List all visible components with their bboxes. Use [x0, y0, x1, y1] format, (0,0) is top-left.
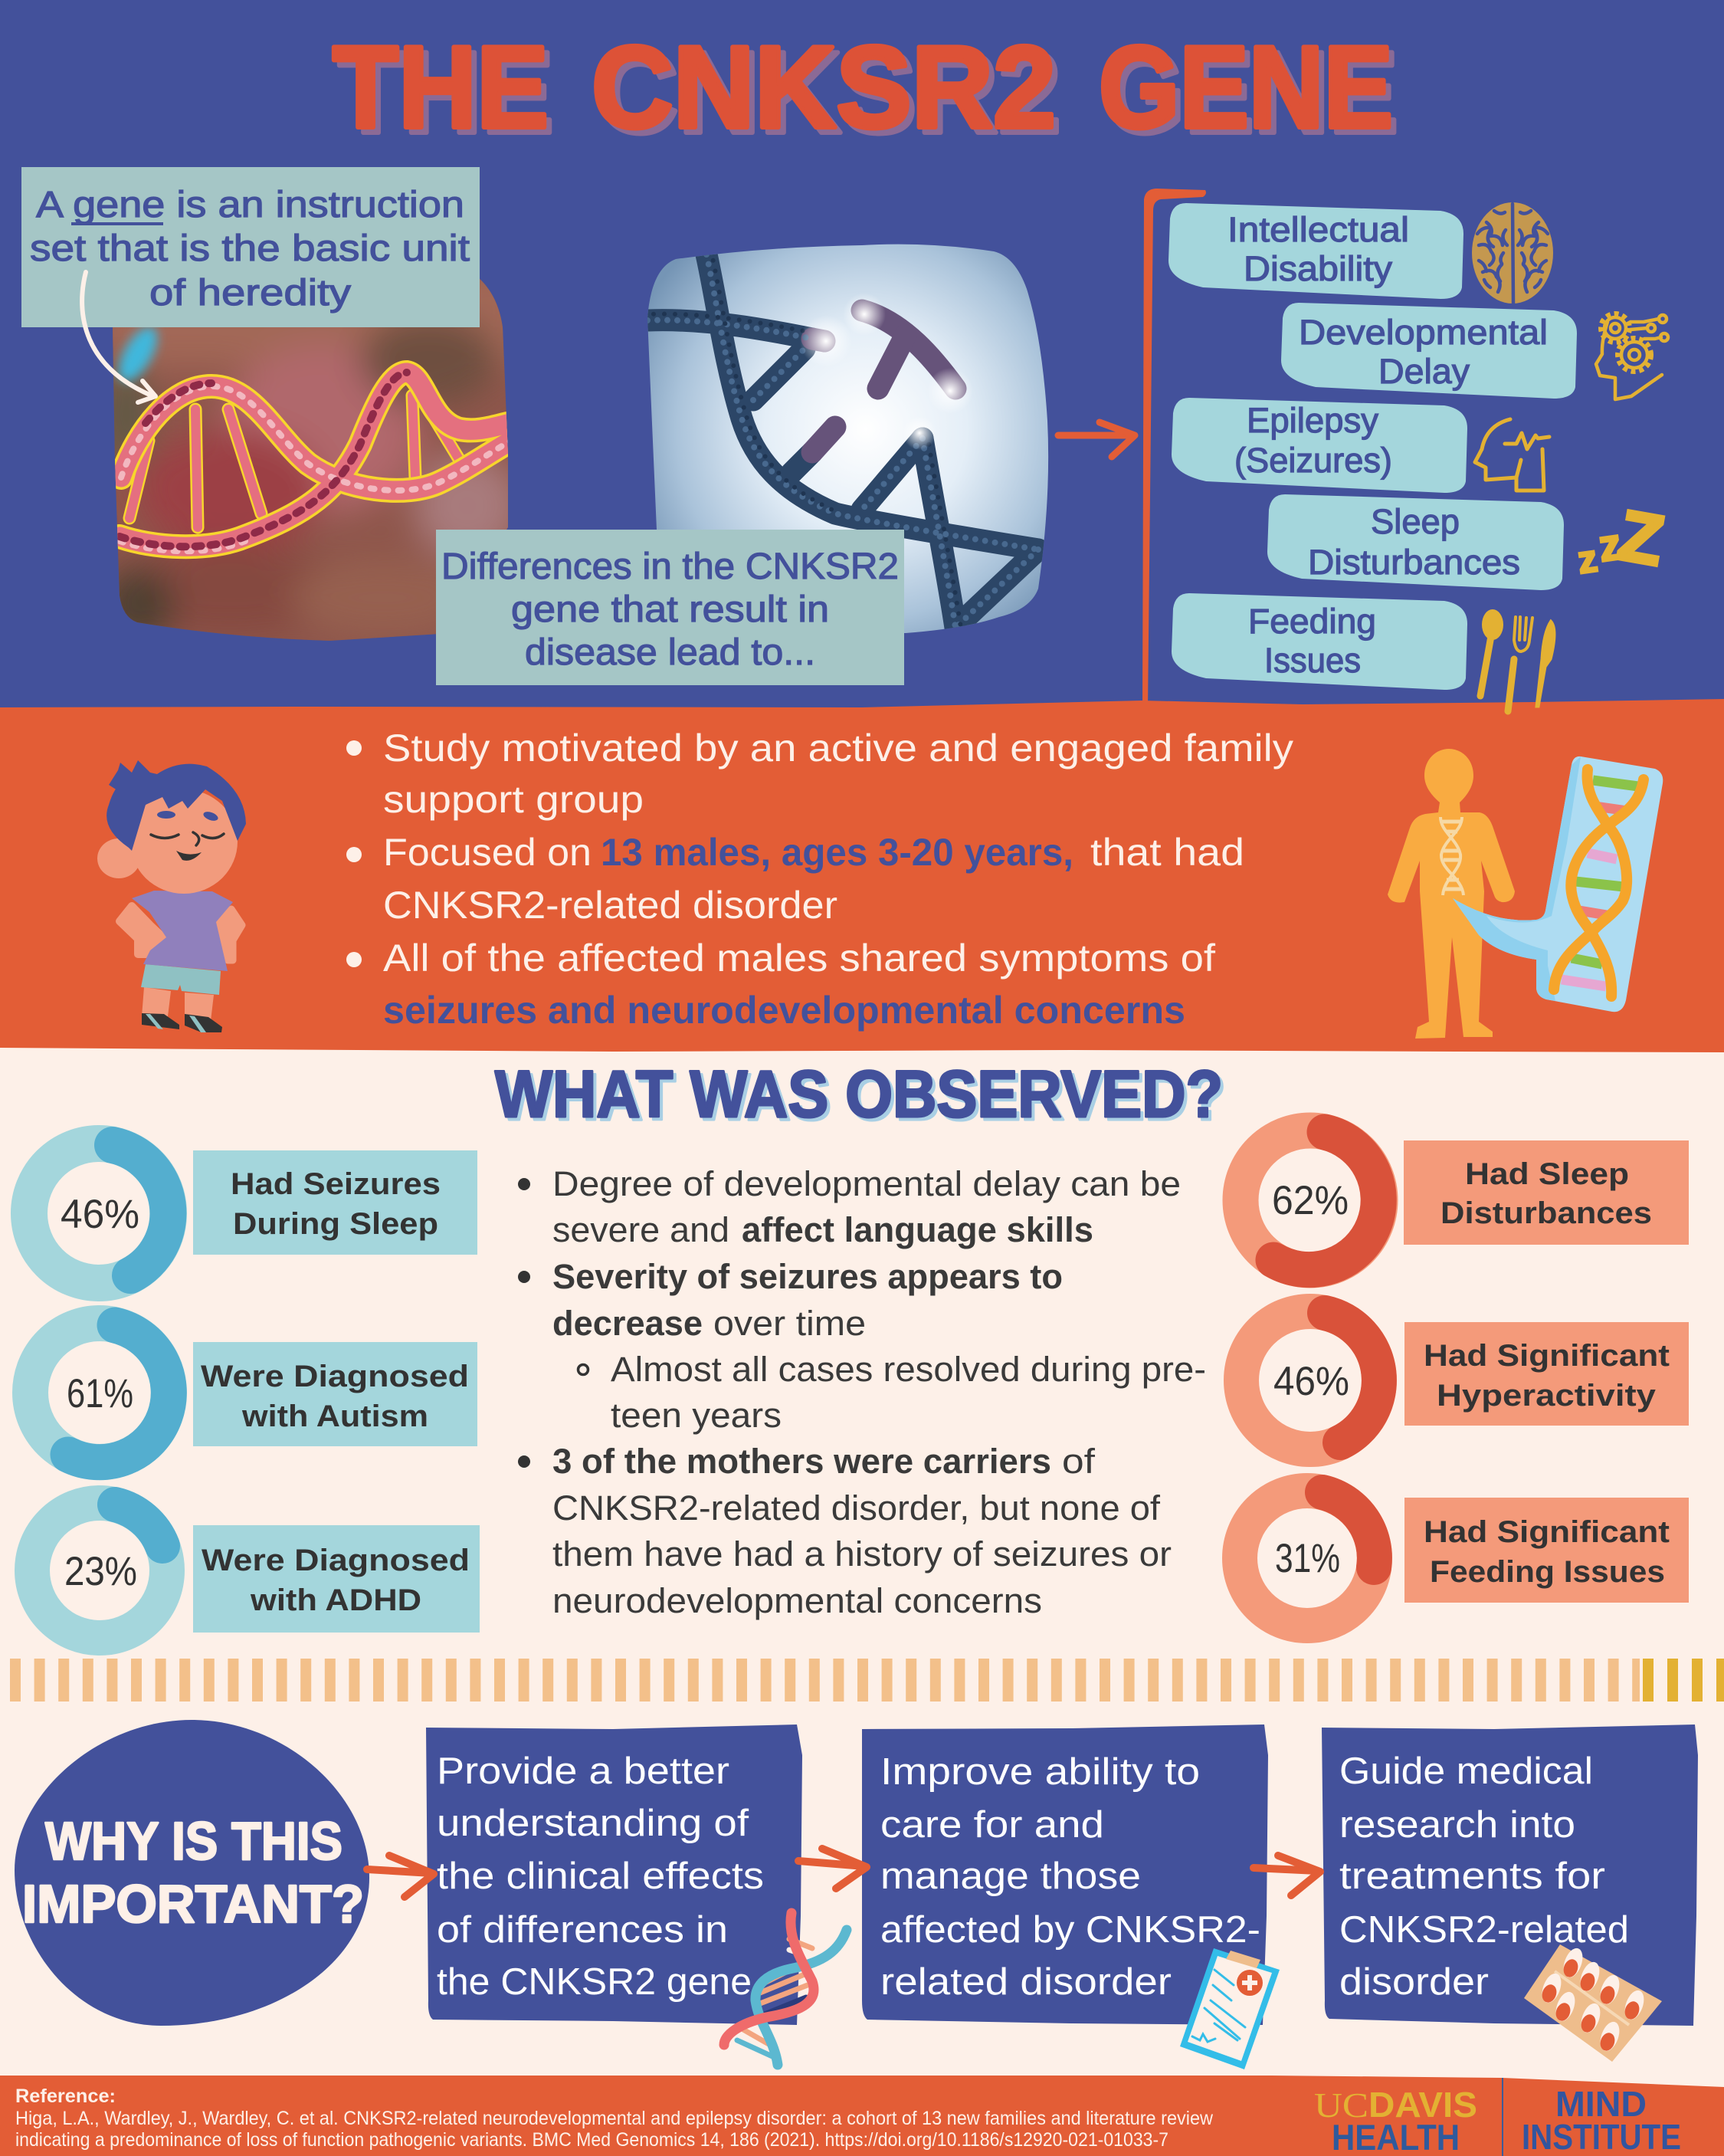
- symptom: developmental delay: [1281, 303, 1577, 399]
- panel: improve care: related disorder: [880, 1961, 1172, 2003]
- panel: better understanding: the clinical effects: [437, 1856, 764, 1897]
- symptom: intellectual disability: Intellectual: [1227, 210, 1409, 249]
- bullet list: observations: affect language skills: [742, 1210, 1093, 1249]
- label: significant hyperactivity: Had Significant: [1424, 1339, 1670, 1373]
- icon: zzz: z: [1595, 519, 1624, 571]
- heading badge: why is this important: WHY IS THIS: [45, 1811, 343, 1871]
- panel: improve care: manage those: [880, 1856, 1141, 1897]
- donut chart: 23% ADHD: 23%: [64, 1549, 137, 1594]
- logo: MIND Institute: [1522, 2084, 1681, 2156]
- donut chart: 61% autism: 61%: [67, 1371, 133, 1416]
- panel: footer band: [0, 2076, 1724, 2156]
- donut chart: 61% autism: [31, 1323, 169, 1462]
- bullet list: study facts: that had: [1090, 831, 1244, 874]
- panel: guide medical research: Guide medical: [1339, 1751, 1593, 1792]
- photo: dark blue beaded DNA on bright sky: [647, 244, 1048, 633]
- heading: what was observed: WHAT WAS OBSERVED?: [495, 1058, 1223, 1131]
- reference citation: [15, 2085, 1214, 2151]
- bullet list: observations: [518, 1164, 1206, 1620]
- label: diagnosed with ADHD: with ADHD: [250, 1583, 421, 1617]
- heading badge: why is this important: [15, 1720, 369, 2026]
- bullet list: observations: of: [1062, 1442, 1096, 1481]
- callout: gene definition: set that is the basic unit: [30, 228, 470, 269]
- panel: better understanding: of differences in: [437, 1909, 728, 1951]
- arrow: second to third benefit: [1254, 1856, 1320, 1895]
- icon: brain: [1472, 202, 1553, 304]
- logo: UC Davis Health: DAVIS: [1368, 2085, 1477, 2125]
- reference citation: indicating a predominance of loss of function pathogenic variants. BMC Med Genomics 14, 186 (2021). https://doi.org/10.1186/s12920-021-01033-7: [15, 2129, 1168, 2151]
- symptom: epilepsy: Epilepsy: [1247, 401, 1379, 440]
- callout: differences lead to: Differences in the CNKSR2: [441, 546, 899, 587]
- bullet list: observations: Severity of seizures appears to: [552, 1257, 1063, 1296]
- donut chart: 46% seizures during sleep: [29, 1144, 169, 1283]
- heading: what was observed: WHAT WAS OBSERVED?: [498, 1061, 1226, 1134]
- label: diagnosed with autism: with Autism: [241, 1400, 428, 1433]
- panel: better understanding: the CNKSR2 gene: [437, 1961, 752, 2003]
- reference citation: Higa, L.A., Wardley, J., Wardley, C. et al. CNKSR2-related neurodevelopmental and epilepsy disorder: a cohort of 13 new families and literature review: [15, 2108, 1214, 2129]
- icon: head with gears: [1596, 313, 1668, 399]
- title: [333, 22, 1398, 158]
- panel: orange study motivation band: [0, 699, 1724, 1052]
- icon: head with seizure pulse: [1475, 419, 1549, 491]
- title: THE: [338, 28, 554, 158]
- bullet list: study facts: support group: [383, 778, 644, 821]
- label: had seizures during sleep: Had Seizures: [231, 1167, 441, 1201]
- panel: better understanding: [426, 1724, 802, 2025]
- panel: improve care: Improve ability to: [880, 1751, 1200, 1793]
- logo: UC Davis Health: [1314, 2085, 1477, 2156]
- bullet list: observations: neurodevelopmental concerns: [552, 1581, 1042, 1620]
- bullet list: observations: Degree of developmental delay can be: [552, 1164, 1181, 1203]
- symptom: feeding issues: [1172, 593, 1467, 690]
- bullet list: observations: Almost all cases resolved during pre-: [611, 1350, 1206, 1389]
- arrow: white curved pointer to DNA: [82, 272, 156, 402]
- bullet list: study facts: seizures and neurodevelopmental concerns: [383, 989, 1185, 1032]
- bullet list: study facts: All of the affected males shared symptoms of: [383, 937, 1215, 980]
- heading badge: why is this important: IMPORTANT?: [22, 1874, 364, 1934]
- label: had sleep disturbances: Disturbances: [1440, 1196, 1652, 1230]
- callout: gene definition: of heredity: [149, 273, 351, 313]
- label: diagnosed with autism: Were Diagnosed: [201, 1360, 469, 1393]
- label: diagnosed with autism: [193, 1342, 477, 1446]
- bullet list: study facts: CNKSR2-related disorder: [383, 884, 837, 927]
- icon: zzz: z: [1575, 537, 1600, 582]
- symptom: sleep disturbances: Sleep: [1371, 502, 1460, 541]
- bullet list: observations: them have had a history of seizures or: [552, 1534, 1172, 1574]
- label: had sleep disturbances: Had Sleep: [1465, 1157, 1629, 1191]
- donut chart: 62% sleep disturbances: 62%: [1272, 1178, 1349, 1223]
- callout: gene definition: [21, 167, 480, 327]
- label: significant hyperactivity: Hyperactivity: [1437, 1379, 1657, 1413]
- panel: guide medical research: [1322, 1724, 1698, 2026]
- title: CNKSR2: [592, 22, 1056, 153]
- donut chart: 46% seizures during sleep: 46%: [61, 1192, 139, 1237]
- label: significant feeding issues: [1404, 1498, 1689, 1603]
- icon: blister pack of pills: [1524, 1944, 1662, 2062]
- title: GENE: [1104, 28, 1398, 158]
- panel: better understanding: Provide a better: [437, 1751, 729, 1792]
- icon: zzz: Z: [1613, 496, 1669, 580]
- bullet list: study facts: Study motivated by an active and engaged family: [383, 727, 1293, 770]
- logo: MIND Institute: INSTITUTE: [1522, 2117, 1681, 2156]
- bullet list: observations: over time: [713, 1304, 866, 1343]
- logo: UC Davis Health: UC: [1314, 2085, 1368, 2125]
- panel: blue header section: [0, 0, 1724, 713]
- illustration: boy with hands on hips: [97, 760, 246, 1032]
- arrow: to symptom bracket: [1058, 422, 1135, 457]
- panel: guide medical research: research into: [1339, 1804, 1575, 1846]
- bullet list: observations: 3 of the mothers were carriers: [552, 1442, 1051, 1481]
- symptom: developmental delay: Delay: [1378, 352, 1470, 391]
- arrow: first to second benefit: [798, 1849, 867, 1889]
- label: significant hyperactivity: [1404, 1322, 1689, 1426]
- symptom: epilepsy: (Seizures): [1234, 441, 1392, 480]
- reference citation: Reference:: [15, 2085, 116, 2107]
- title: THE: [333, 22, 549, 153]
- arrow: why to first benefit: [367, 1856, 434, 1897]
- bracket: symptom list: [1142, 189, 1206, 709]
- panel: improve care: [862, 1724, 1268, 2025]
- symptom: developmental delay: Developmental: [1299, 313, 1548, 352]
- callout: differences lead to: [436, 530, 904, 685]
- panel: improve care: care for and: [880, 1804, 1104, 1846]
- callout: differences lead to: disease lead to...: [525, 632, 815, 673]
- title: GENE: [1099, 22, 1393, 153]
- panel: improve care: affected by CNKSR2-: [880, 1909, 1260, 1951]
- symptom: feeding issues: Feeding: [1248, 602, 1376, 641]
- symptom: sleep disturbances: Disturbances: [1308, 543, 1520, 582]
- bullet list: study facts: [346, 727, 1293, 1032]
- donut chart: 62% sleep disturbances: [1241, 1131, 1380, 1270]
- donut chart: 31% feeding issues: 31%: [1275, 1536, 1340, 1581]
- label: significant feeding issues: Had Significant: [1424, 1515, 1670, 1549]
- symptom: feeding issues: Issues: [1264, 641, 1361, 680]
- logo: MIND Institute: MIND: [1555, 2084, 1647, 2124]
- icon: spoon fork knife: [1480, 609, 1555, 711]
- symptom: sleep disturbances: [1267, 494, 1564, 590]
- bullet list: observations: decrease: [552, 1304, 703, 1343]
- photo: gold and pink DNA strand on blurred red background: [113, 279, 508, 641]
- title: CNKSR2: [597, 28, 1061, 158]
- panel: guide medical research: disorder: [1339, 1961, 1489, 2003]
- bullet list: study facts: Focused on: [383, 831, 592, 874]
- callout: differences lead to: gene that result in: [511, 589, 829, 630]
- icon: DNA helix: [724, 1913, 847, 2065]
- bullet list: observations: severe and: [552, 1210, 729, 1249]
- bullet list: study facts: 13 males, ages 3-20 years,: [601, 831, 1073, 874]
- symptom: intellectual disability: Disability: [1244, 249, 1393, 288]
- illustration: person with DNA callout: [1388, 749, 1663, 1039]
- icon: zzz: [1575, 496, 1669, 582]
- label: significant feeding issues: Feeding Issues: [1430, 1555, 1665, 1589]
- donut chart: 31% feeding issues: [1240, 1491, 1375, 1626]
- label: had sleep disturbances: [1404, 1140, 1689, 1245]
- donut chart: 46% hyperactivity: 46%: [1273, 1359, 1349, 1404]
- donut chart: 23% ADHD: [32, 1503, 167, 1638]
- symptom: intellectual disability: [1168, 203, 1463, 299]
- donut chart: 46% hyperactivity: [1241, 1311, 1379, 1449]
- icon: clipboard with medical notes: [1180, 1948, 1280, 2069]
- label: diagnosed with ADHD: Were Diagnosed: [202, 1544, 470, 1577]
- symptom: epilepsy: [1172, 398, 1467, 493]
- panel: guide medical research: treatments for: [1339, 1856, 1605, 1897]
- bullet list: observations: CNKSR2-related disorder, but none of: [552, 1488, 1161, 1528]
- panel: better understanding: understanding of: [437, 1803, 749, 1844]
- label: diagnosed with ADHD: [193, 1525, 480, 1633]
- bullet list: observations: teen years: [611, 1396, 782, 1435]
- label: had seizures during sleep: [193, 1150, 477, 1255]
- label: had seizures during sleep: During Sleep: [233, 1207, 438, 1241]
- panel: guide medical research: CNKSR2-related: [1339, 1909, 1629, 1951]
- callout: gene definition: A gene is an instruction: [36, 185, 464, 225]
